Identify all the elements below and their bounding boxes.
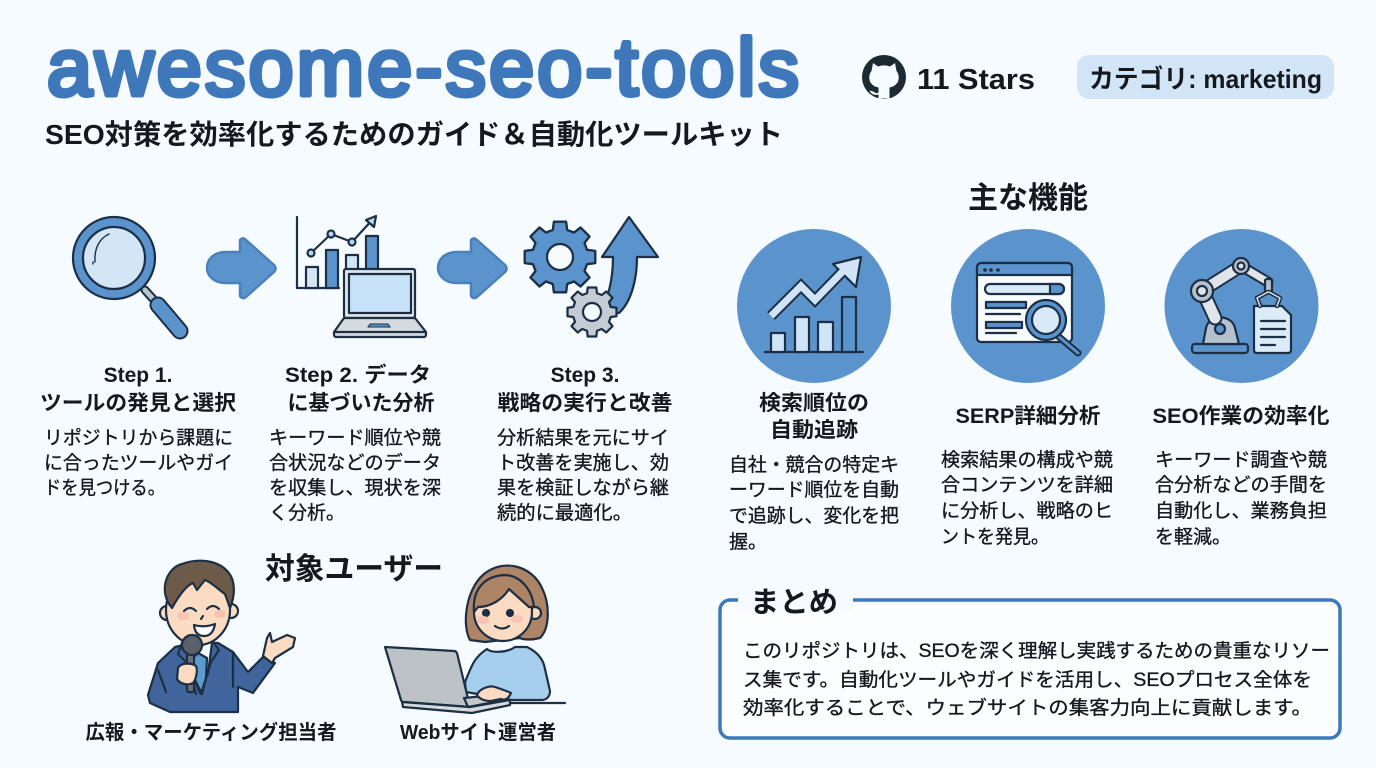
- feature 1 text: 検索順位の: [759, 392, 869, 415]
- label: PR marketing person: 広報・マーケティング担当者: [86, 720, 336, 744]
- step 3 text: 戦略の実行と改善: [498, 392, 672, 415]
- icon: chart and laptop: [297, 216, 426, 337]
- step 2 text: 合状況などのデータ: [269, 452, 441, 474]
- laptop: [334, 269, 426, 337]
- step 2 text: を収集し、現状を深: [269, 477, 441, 499]
- step 3 text: [497, 364, 672, 524]
- step 1 text: [40, 364, 236, 499]
- step 3 text: 果を検証しながら継: [497, 477, 669, 499]
- feature 1 text: [729, 392, 899, 553]
- github stars: [862, 55, 1035, 99]
- step 1 text: に合ったツールやガイ: [44, 452, 233, 474]
- feature 2 text: 合コンテンツを詳細: [941, 474, 1113, 496]
- feature 2 text: に分析し、戦略のヒ: [941, 500, 1113, 522]
- subtitle: SEO対策を効率化するためのガイド＆自動化ツールキット: [45, 119, 783, 150]
- arrow: step 1 to step 2: [207, 238, 276, 298]
- feature 2 text: SERP詳細分析: [956, 405, 1100, 428]
- panel: summary: [720, 587, 1340, 738]
- step 1 text: ドを見つける。: [44, 478, 165, 499]
- summary body: 効率化することで、ウェブサイトの集客力向上に貢献します。: [743, 696, 1312, 719]
- feature 3 text: 自動化し、業務負担: [1155, 500, 1327, 522]
- label: website operator: Webサイト運営者: [400, 721, 556, 744]
- step 2 text: キーワード順位や競: [269, 427, 441, 449]
- feature 2 text: 検索結果の構成や競: [941, 449, 1113, 471]
- icon: magnifier: [73, 217, 180, 331]
- step 3 text: 続的に最適化。: [497, 502, 632, 524]
- feature 3 text: を軽減。: [1155, 526, 1231, 548]
- illustration: PR marketing person: [148, 561, 295, 712]
- step 1 text: Step 1.: [104, 364, 172, 387]
- summary heading: まとめ: [750, 587, 838, 619]
- feature 1 text: で追跡し、変化を把: [729, 505, 899, 527]
- summary body: ス集です。自動化ツールやガイドを活用し、SEOプロセス全体を: [743, 669, 1312, 691]
- feature 2 text: [941, 405, 1113, 548]
- step 3 text: ト改善を実施し、効: [497, 452, 669, 474]
- stars count: 11 Stars: [917, 64, 1035, 96]
- step 1 text: ツールの発見と選択: [40, 392, 236, 415]
- heading: target users: 対象ユーザー: [265, 553, 443, 586]
- step 2 text: [269, 363, 441, 524]
- summary body: このリポジトリは、SEOを深く理解し実践するための貴重なリソー: [743, 640, 1330, 662]
- category badge: カテゴリ: marketing: [1089, 64, 1322, 94]
- illustration: website operator: [385, 566, 565, 713]
- icon: rank tracking: [737, 229, 891, 383]
- feature 1 text: 自社・競合の特定キ: [729, 454, 899, 476]
- step 2 text: に基づいた分析: [288, 392, 434, 415]
- title: awesome-seo-tools: [47, 23, 799, 113]
- step 1 text: リポジトリから課題に: [44, 427, 233, 449]
- feature 1 text: 握。: [729, 531, 767, 553]
- feature 3 text: 合分析などの手間を: [1155, 474, 1327, 496]
- step 2 text: Step 2. データ: [285, 363, 431, 387]
- icon: serp analysis: [951, 229, 1105, 383]
- heading: features: 主な機能: [968, 182, 1088, 215]
- icon: github: [862, 55, 906, 99]
- category badge: [1077, 55, 1334, 99]
- feature 3 text: SEO作業の効率化: [1152, 405, 1330, 428]
- feature 1 text: ーワード順位を自動: [729, 479, 899, 501]
- feature 1 text: 自動追跡: [770, 419, 858, 442]
- feature 3 text: キーワード調査や競: [1155, 449, 1327, 471]
- feature 2 text: ントを発見。: [941, 526, 1049, 548]
- step 3 text: Step 3.: [551, 364, 619, 387]
- feature 3 text: [1152, 405, 1330, 548]
- step 2 text: く分析。: [269, 502, 345, 524]
- summary body: [743, 640, 1330, 719]
- step 3 text: 分析結果を元にサイ: [497, 427, 669, 449]
- icon: gears and up arrow: [525, 217, 658, 336]
- arrow: step 2 to step 3: [438, 238, 506, 298]
- icon: automation robot: [1164, 229, 1318, 383]
